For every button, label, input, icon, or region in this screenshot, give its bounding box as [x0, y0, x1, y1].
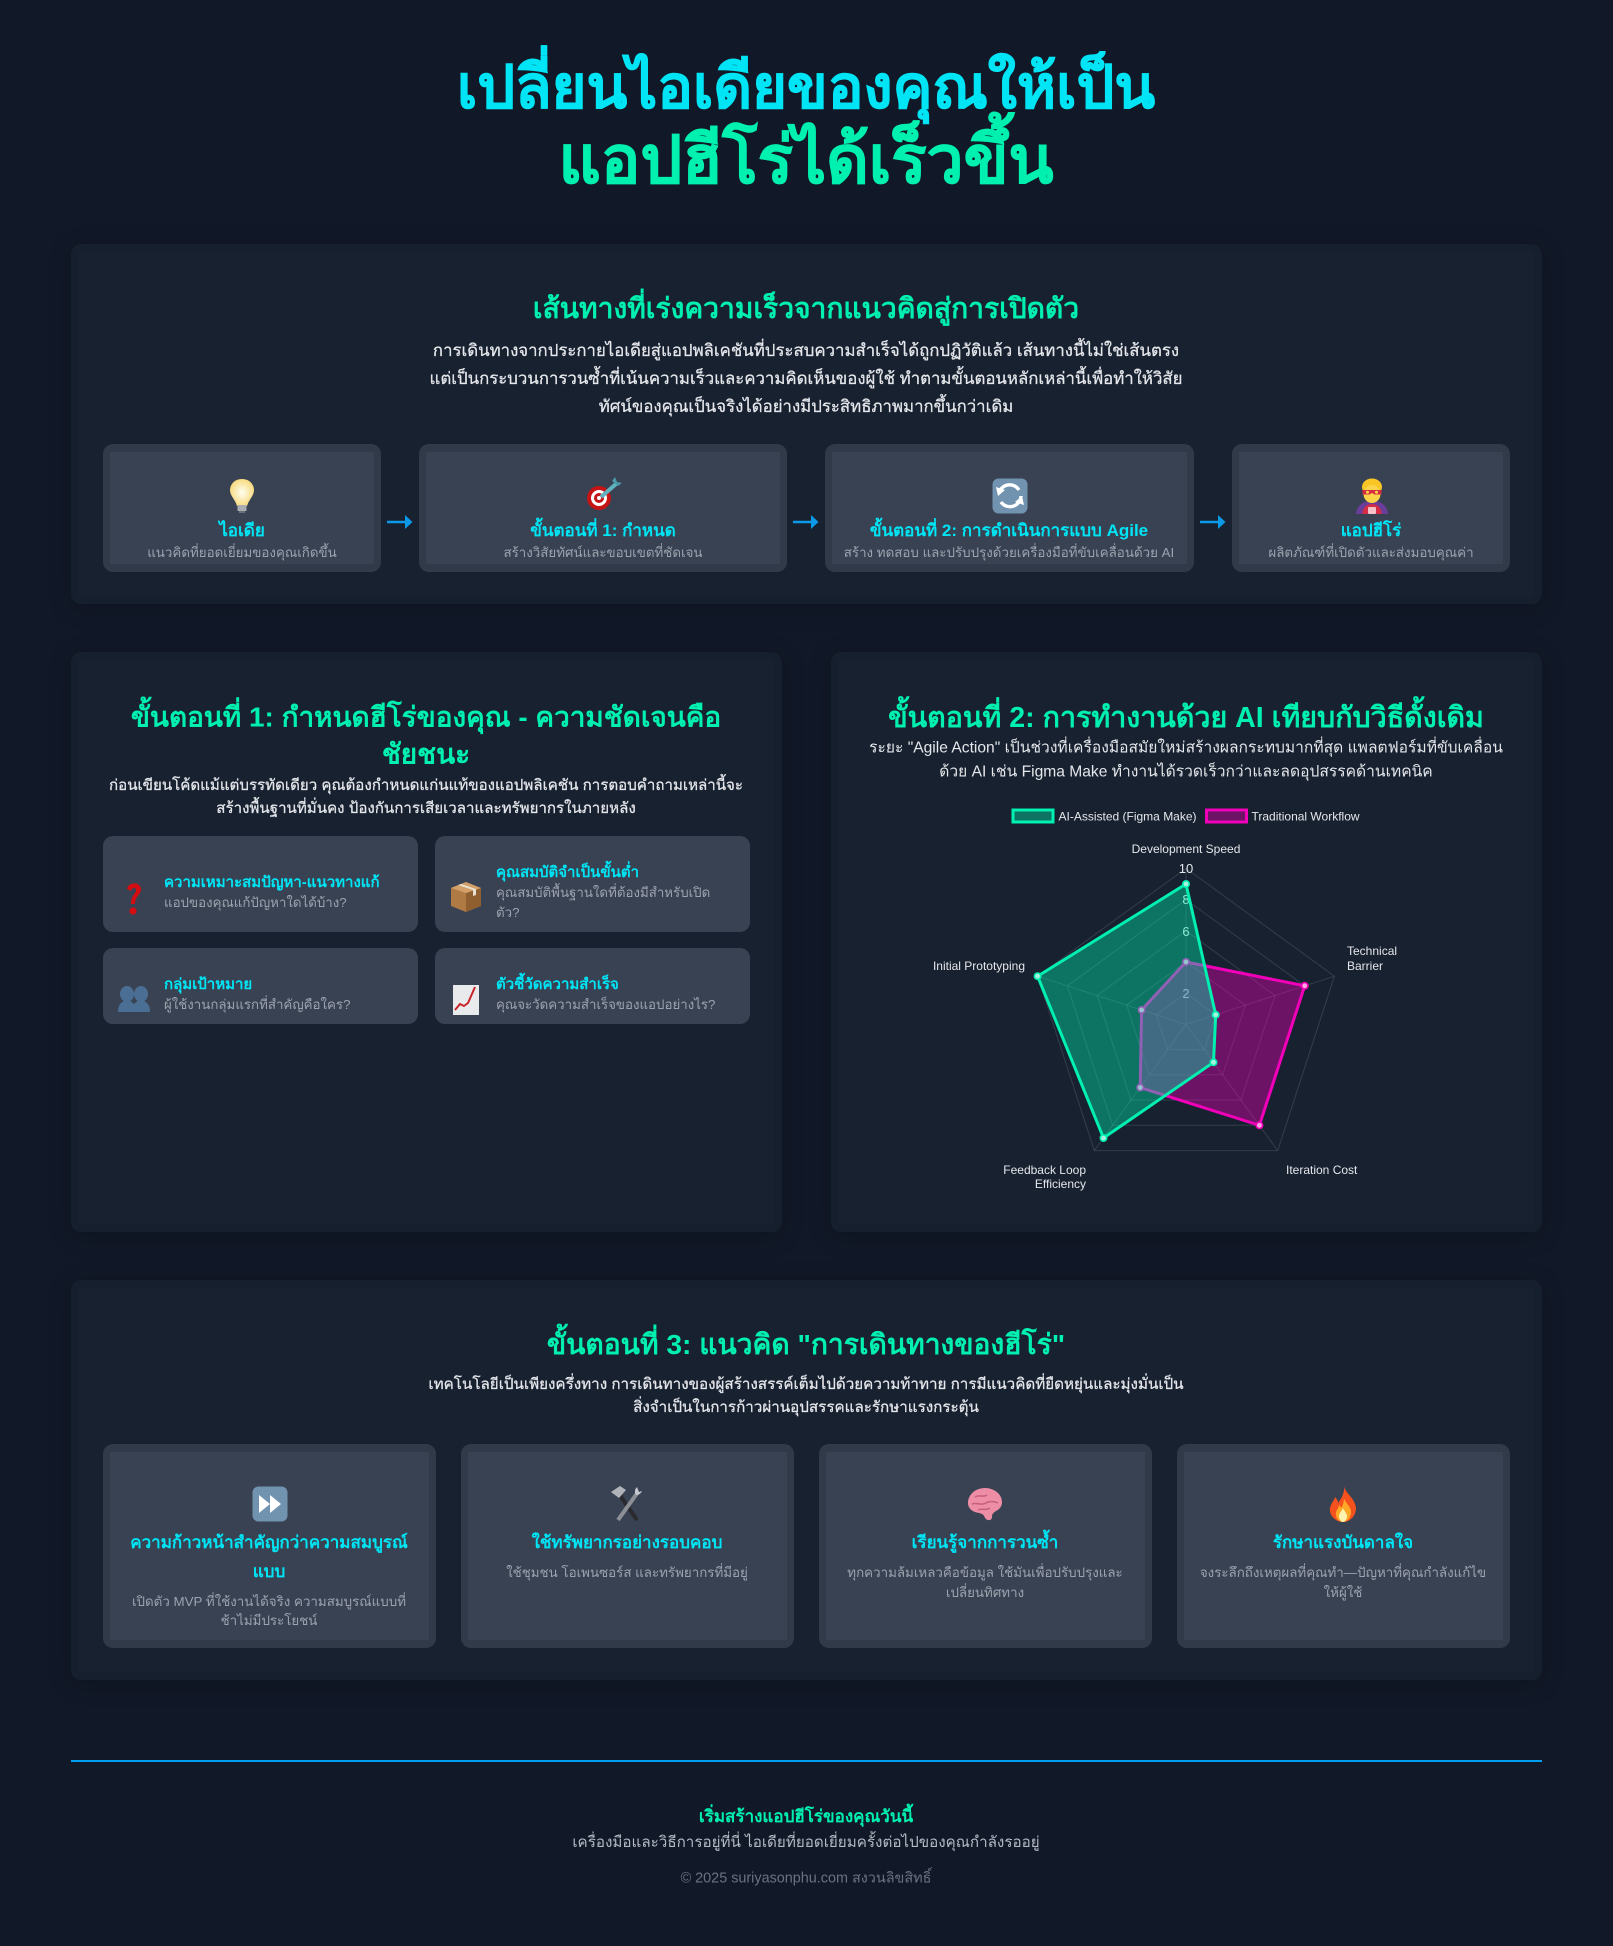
- card: progress over perfection: [103, 1444, 436, 1648]
- arrow: [793, 515, 818, 529]
- card: app hero: [1232, 444, 1510, 572]
- icon: fire: [1330, 1486, 1356, 1522]
- card description: สร้างวิสัยทัศน์และขอบเขตที่ชัดเจน: [503, 545, 703, 560]
- card: learn from iteration: [819, 1444, 1152, 1648]
- panel: step 1: [71, 652, 782, 1232]
- icon: question mark: [127, 883, 141, 915]
- axis tick labels: 6: [1182, 924, 1190, 939]
- copyright: © 2025 suriyasonphu.com สงวนลิขสิทธิ์: [681, 1870, 931, 1886]
- icon: chart: [453, 985, 479, 1015]
- card: use resources: [461, 1444, 794, 1648]
- card: step 2 agile: [825, 444, 1194, 572]
- axis labels: Iteration Cost: [1286, 1163, 1358, 1177]
- card description line 2: ให้ผู้ใช้: [1324, 1585, 1362, 1600]
- title line 1: เปลี่ยนไอเดียของคุณให้เป็น: [457, 53, 1155, 120]
- step 3 text: [428, 1373, 1184, 1416]
- card: success metrics: [435, 948, 750, 1024]
- axis labels: Initial Prototyping: [933, 959, 1025, 973]
- axis tick labels: [1179, 861, 1193, 1001]
- radar chart: [933, 808, 1397, 1191]
- heading: step 1: ชัยชนะ: [382, 738, 470, 769]
- panel: step 2: [831, 652, 1542, 1232]
- card description: คุณสมบัติพื้นฐานใดที่ต้องมีสำหรับเปิด: [496, 885, 710, 900]
- arrow: [1200, 515, 1226, 529]
- axis labels: Efficiency: [1035, 1177, 1086, 1191]
- step 2 text: ระยะ "Agile Action" เป็นช่วงที่เครื่องมือสมัยใหม่สร้างผลกระทบมากที่สุด แพลตฟอร์มที่ขับเคลื่อน: [869, 740, 1503, 757]
- axis labels: Feedback Loop: [1003, 1163, 1086, 1177]
- card: minimum features: [435, 836, 750, 932]
- icon: package: [451, 882, 481, 912]
- icon: people: [118, 986, 150, 1012]
- axis labels: Barrier: [1347, 959, 1383, 973]
- heading: accelerated path: เส้นทางที่เร่งความเร็วจากแนวคิดสู่การเปิดตัว: [533, 292, 1079, 324]
- card description line 2: ตัว?: [496, 905, 520, 920]
- panel: accelerated path: [71, 244, 1542, 604]
- axis labels: Development Speed: [1132, 842, 1240, 856]
- data series: AI-assisted: [1034, 881, 1219, 1141]
- step 2 text: ด้วย AI เช่น Figma Make ทำงานได้รวดเร็วกว่าและลดอุปสรรคด้านเทคนิค: [939, 764, 1433, 781]
- step 1 text: ก่อนเขียนโค้ดแม้แต่บรรทัดเดียว คุณต้องกำหนดแก่นแท้ของแอปพลิเคชัน การตอบคำถามเหล่านี้จะ: [109, 777, 743, 794]
- footer: [71, 1760, 1542, 1902]
- card description: ใช้ชุมชน โอเพนซอร์ส และทรัพยากรที่มีอยู่: [506, 1565, 748, 1580]
- card: idea: [103, 444, 381, 572]
- legend: AI-Assisted (Figma Make): [1058, 810, 1197, 824]
- intro text: แต่เป็นกระบวนการวนซ้ำที่เน้นความเร็วและความคิดเห็นของผู้ใช้ ทำตามขั้นตอนหลักเหล่านี้เพื่อทำให้วิสัย: [430, 369, 1182, 388]
- icon: fast forward: [252, 1486, 288, 1522]
- card title: คุณสมบัติจำเป็นขั้นต่ำ: [496, 864, 639, 881]
- step 3 text: สิ่งจำเป็นในการก้าวผ่านอุปสรรคและรักษาแรงกระตุ้น: [633, 1399, 979, 1416]
- icon: superhero: [1356, 478, 1388, 514]
- axis labels: Technical: [1347, 944, 1397, 958]
- card description: จงระลึกถึงเหตุผลที่คุณทำ—ปัญหาที่คุณกำลังแก้ไข: [1200, 1565, 1486, 1580]
- step 3 text: เทคโนโลยีเป็นเพียงครึ่งทาง การเดินทางของผู้สร้างสรรค์เต็มไปด้วยความท้าทาย การมีแนวคิดที่ยืดหยุ่นและมุ่งมั่นเป็น: [428, 1376, 1184, 1393]
- intro text: [430, 338, 1182, 416]
- card title line 2: แบบ: [253, 1562, 285, 1581]
- card description: ทุกความล้มเหลวคือข้อมูล ใช้มันเพื่อปรับปรุงและ: [847, 1565, 1123, 1580]
- panel: step 3: [71, 1280, 1542, 1680]
- card title: รักษาแรงบันดาลใจ: [1273, 1533, 1413, 1552]
- icon: refresh: [992, 478, 1028, 514]
- axis tick labels: 8: [1182, 892, 1190, 907]
- heading: step 1: ขั้นตอนที่ 1: กำหนดฮีโร่ของคุณ - ความชัดเจนคือ: [131, 701, 721, 732]
- arrow: [387, 515, 412, 529]
- card title: ความเหมาะสมปัญหา-แนวทางแก้: [164, 874, 380, 891]
- legend: Traditional Workflow: [1252, 810, 1360, 824]
- card title: กลุ่มเป้าหมาย: [164, 976, 252, 993]
- heading: step 2: ขั้นตอนที่ 2: การทำงานด้วย AI เทียบกับวิธีดั้งเดิม: [888, 702, 1484, 734]
- card description line 2: เปลี่ยนทิศทาง: [946, 1585, 1024, 1600]
- heading: step 1: [131, 696, 721, 769]
- card title: ขั้นตอนที่ 1: กำหนด: [530, 521, 676, 540]
- card title: ขั้นตอนที่ 2: การดำเนินการแบบ Agile: [870, 521, 1148, 540]
- card title: ใช้ทรัพยากรอย่างรอบคอบ: [532, 1533, 722, 1552]
- data series: traditional workflow: [1137, 959, 1308, 1129]
- card description: ผู้ใช้งานกลุ่มแรกที่สำคัญคือใคร?: [164, 997, 350, 1012]
- footer text: เครื่องมือและวิธีการอยู่ที่นี่ ไอเดียที่ยอดเยี่ยมครั้งต่อไปของคุณกำลังรออยู่: [572, 1834, 1040, 1851]
- card description: แนวคิดที่ยอดเยี่ยมของคุณเกิดขึ้น: [147, 545, 337, 560]
- card title: ไอเดีย: [219, 521, 265, 540]
- step 1 text: สร้างพื้นฐานที่มั่นคง ป้องกันการเสียเวลาและทรัพยากรในภายหลัง: [216, 800, 636, 817]
- card title: เรียนรู้จากการวนซ้ำ: [912, 1533, 1058, 1552]
- card: target audience: [103, 948, 418, 1024]
- axis tick labels: 10: [1179, 861, 1193, 876]
- axis tick labels: 2: [1182, 986, 1190, 1001]
- card title: ตัวชี้วัดความสำเร็จ: [496, 976, 619, 993]
- card description: คุณจะวัดความสำเร็จของแอปอย่างไร?: [496, 997, 715, 1012]
- card: step 1 define: [419, 444, 787, 572]
- footer call to action: เริ่มสร้างแอปฮีโร่ของคุณวันนี้: [699, 1807, 913, 1826]
- step 2 text: [869, 736, 1503, 781]
- step 1 text: [109, 774, 743, 818]
- axis labels: [933, 842, 1397, 1191]
- icon: target: [587, 477, 622, 510]
- card title: แอปฮีโร่: [1341, 521, 1401, 540]
- icon: brain: [968, 1488, 1002, 1520]
- legend: [1013, 810, 1360, 824]
- card description: สร้าง ทดสอบ และปรับปรุงด้วยเครื่องมือที่ขับเคลื่อนด้วย AI: [844, 545, 1174, 560]
- icon: tools: [611, 1486, 642, 1521]
- card title: ความก้าวหน้าสำคัญกว่าความสมบูรณ์: [130, 1533, 408, 1552]
- card description: ผลิตภัณฑ์ที่เปิดตัวและส่งมอบคุณค่า: [1268, 545, 1474, 560]
- card: keep motivation: [1177, 1444, 1510, 1648]
- intro text: การเดินทางจากประกายไอเดียสู่แอปพลิเคชันที่ประสบความสำเร็จได้ถูกปฏิวัติแล้ว เส้นทางนี้ไม่ใช่เส้นตรง: [433, 341, 1179, 360]
- intro text: ทัศน์ของคุณเป็นจริงได้อย่างมีประสิทธิภาพมากขึ้นกว่าเดิม: [599, 397, 1013, 416]
- title: [457, 45, 1155, 197]
- card description line 2: ช้าไม่มีประโยชน์: [221, 1613, 317, 1628]
- card description: แอปของคุณแก้ปัญหาใดได้บ้าง?: [164, 895, 347, 910]
- heading: step 3: ขั้นตอนที่ 3: แนวคิด "การเดินทางของฮีโร่": [547, 1328, 1065, 1360]
- title line 2: แอปฮีโร่ได้เร็วขึ้น: [558, 123, 1054, 197]
- icon: light bulb: [230, 479, 254, 513]
- card description: เปิดตัว MVP ที่ใช้งานได้จริง ความสมบูรณ์แบบที่: [132, 1594, 406, 1609]
- card: problem-solution fit: [103, 836, 418, 932]
